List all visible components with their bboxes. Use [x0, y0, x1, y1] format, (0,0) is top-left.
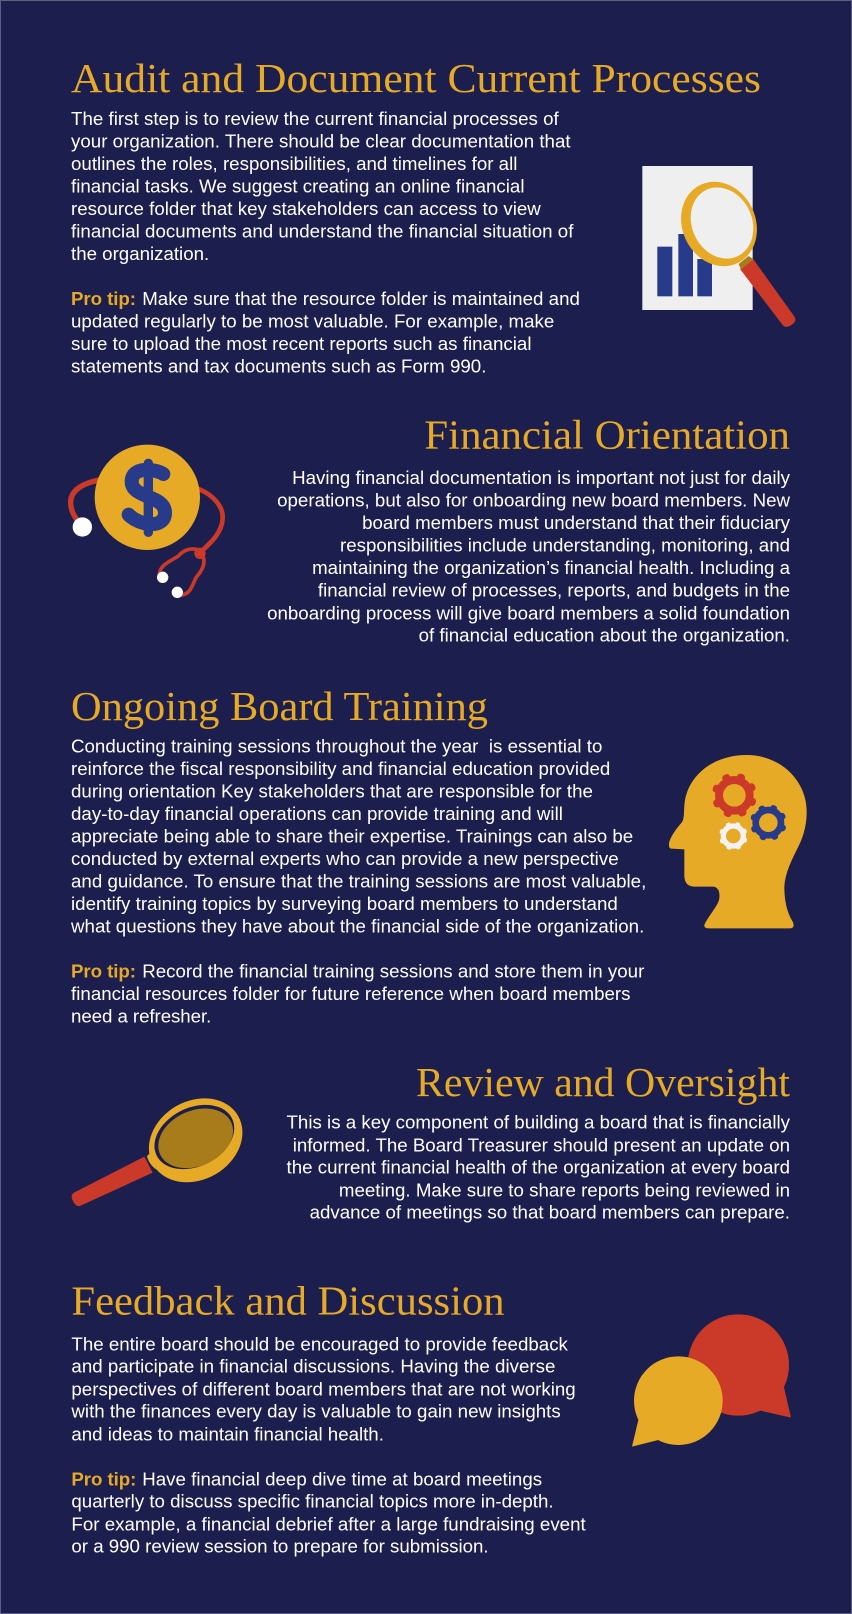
- text block: audit intro: The first step is to review the current financial processes of: [71, 108, 559, 129]
- text block: audit intro: the organization.: [71, 243, 209, 264]
- text block: audit pro tip: Pro tip:: [71, 288, 136, 309]
- text block: training body: identify training topics by surveying board members to understand: [71, 893, 618, 914]
- text block: orientation body: responsibilities include understanding, monitoring, and: [340, 535, 790, 556]
- text block: training pro tip: financial resources folder for future reference when board members: [71, 983, 630, 1004]
- text block: audit pro tip: updated regularly to be most valuable. For example, make: [71, 310, 554, 332]
- icon: speech bubbles: [632, 1314, 791, 1447]
- heading: review and oversight: Review and Oversight: [416, 1059, 791, 1105]
- text block: review body: This is a key component of building a board that is financially: [286, 1112, 791, 1133]
- heading: ongoing board training: Ongoing Board Training: [71, 683, 488, 729]
- heading: audit and document: Audit and Document Current Processes: [71, 55, 761, 101]
- text block: training pro tip: need a refresher.: [71, 1006, 211, 1027]
- text block: feedback pro tip: [71, 1469, 586, 1557]
- text block: orientation body: financial review of processes, reports, and budgets in the: [318, 580, 790, 601]
- text block: training pro tip: Record the financial training sessions and store them in your: [142, 961, 644, 982]
- heading: feedback and discussion: Feedback and Discussion: [71, 1278, 505, 1324]
- text block: feedback body: perspectives of different board members that are not working: [71, 1378, 576, 1399]
- icon: head with gears: [669, 755, 807, 928]
- text block: audit intro: outlines the roles, responsibilities, and timelines for all: [71, 153, 517, 174]
- text block: feedback body: [70, 1333, 576, 1444]
- icon: coin with stethoscope: [71, 445, 223, 598]
- heading: financial orientation: Financial Orientation: [424, 411, 790, 457]
- text block: audit pro tip: statements and tax documents such as Form 990.: [71, 356, 486, 376]
- panel: financial orientation: [71, 411, 791, 646]
- text block: audit intro: [71, 108, 574, 264]
- text block: feedback body: with the finances every day is valuable to gain new insights: [70, 1401, 561, 1422]
- icon: magnifying glass: [72, 1082, 258, 1206]
- text block: orientation body: of financial education about the organization.: [419, 625, 790, 646]
- text block: training body: during orientation Key stakeholders that are responsible for the: [71, 781, 593, 802]
- text block: review body: informed. The Board Treasurer should present an update on: [293, 1134, 790, 1155]
- text block: training pro tip: Pro tip:: [71, 961, 136, 982]
- panel: ongoing board training: [70, 683, 807, 1027]
- text block: feedback pro tip: For example, a financial debrief after a large fundraising event: [71, 1514, 586, 1535]
- text block: orientation body: operations, but also for onboarding new board members. New: [277, 490, 791, 511]
- text block: training body: conducted by external experts who can provide a new perspective: [71, 848, 619, 869]
- text block: orientation body: board members must understand that their fiduciary: [362, 512, 791, 533]
- text block: training body: [70, 736, 646, 937]
- text block: training body: what questions they have about the financial side of the organization.: [70, 916, 644, 937]
- panel: audit and document current processes: [71, 55, 795, 376]
- text block: orientation body: Having financial documentation is important not just for daily: [292, 467, 791, 488]
- text block: orientation body: onboarding process will give board members a solid foundation: [267, 602, 790, 623]
- text block: training body: and guidance. To ensure that the training sessions are most valuable,: [71, 871, 646, 892]
- text block: audit intro: financial tasks. We suggest creating an online financial: [71, 176, 524, 196]
- text block: training body: reinforce the fiscal responsibility and financial education provided: [71, 758, 610, 779]
- text block: training body: day-to-day financial operations can provide training and will: [71, 803, 563, 824]
- text block: training pro tip: [71, 961, 644, 1027]
- text block: review body: the current financial health of the organization at every board: [286, 1157, 790, 1178]
- text block: feedback body: The entire board should be encouraged to provide feedback: [71, 1333, 569, 1354]
- text block: orientation body: [267, 467, 791, 646]
- text block: audit pro tip: sure to upload the most recent reports such as financial: [71, 333, 532, 354]
- icon: report with magnifying glass: [642, 166, 795, 327]
- text block: feedback body: and participate in financial discussions. Having the diverse: [71, 1356, 555, 1377]
- text block: feedback pro tip: Pro tip:: [71, 1469, 136, 1490]
- text block: feedback pro tip: quarterly to discuss specific financial topics more in-depth.: [71, 1491, 554, 1512]
- text block: review body: meeting. Make sure to share reports being reviewed in: [339, 1179, 790, 1200]
- panel: review and oversight: [72, 1059, 791, 1223]
- text block: review body: [286, 1112, 791, 1223]
- text block: review body: advance of meetings so that board members can prepare.: [310, 1202, 790, 1223]
- text block: orientation body: maintaining the organization’s financial health. Including a: [312, 557, 791, 578]
- text block: feedback body: and ideas to maintain financial health.: [71, 1423, 384, 1444]
- text block: training body: appreciate being able to share their expertise. Trainings can also be: [71, 826, 633, 847]
- text block: audit pro tip: Make sure that the resource folder is maintained and: [142, 288, 580, 309]
- text block: training body: Conducting training sessions throughout the year is essential to: [71, 736, 602, 757]
- panel: feedback and discussion: [70, 1278, 791, 1557]
- text block: audit intro: resource folder that key stakeholders can access to view: [71, 198, 541, 219]
- text block: audit intro: your organization. There should be clear documentation that: [71, 130, 571, 152]
- text block: audit pro tip: [71, 288, 580, 376]
- text block: audit intro: financial documents and understand the financial situation of: [71, 220, 574, 242]
- text block: feedback pro tip: or a 990 review session to prepare for submission.: [71, 1536, 489, 1557]
- text block: feedback pro tip: Have financial deep dive time at board meetings: [142, 1469, 542, 1490]
